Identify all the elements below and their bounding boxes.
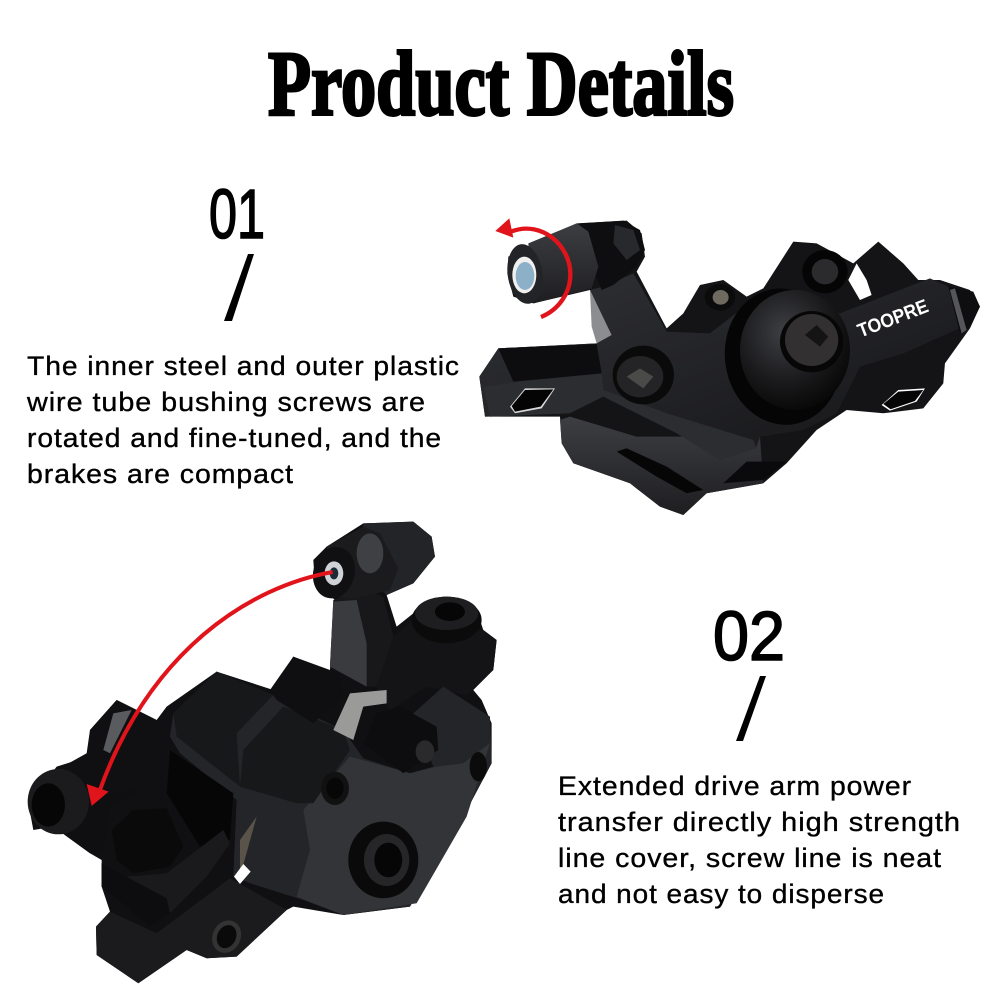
text block 01: brakes are compact	[27, 459, 294, 489]
center screw	[348, 822, 418, 898]
bottom mounting bracket	[96, 878, 287, 983]
step marker 01	[209, 175, 265, 321]
text block 02: and not easy to disperse	[558, 879, 885, 909]
main housing	[170, 672, 492, 915]
mounting bolt	[613, 346, 674, 404]
step marker 02: 02	[713, 597, 785, 675]
end tip	[948, 287, 980, 333]
red sweep arrow	[87, 572, 333, 806]
bulge and pivot bolt	[716, 281, 851, 432]
top right arm and bolt	[377, 620, 497, 710]
text block 02: Extended drive arm power	[558, 771, 912, 801]
photo: brake caliper top view with rotation arrow	[479, 218, 980, 515]
white gap under cavity	[234, 864, 251, 884]
brand label: TOOPRE	[855, 296, 932, 342]
holes	[321, 772, 349, 805]
lever arm	[330, 590, 400, 687]
caliper silhouette	[479, 221, 980, 515]
open cavity	[167, 750, 233, 847]
red rotation arrow	[495, 218, 570, 317]
step marker 01: 01	[209, 175, 265, 253]
photo: brake caliper rear view with red arrow	[28, 522, 497, 983]
small cylinders and spring	[270, 657, 343, 723]
lower block	[102, 830, 230, 927]
text block 02	[558, 771, 961, 909]
step marker 02	[713, 597, 785, 741]
right mount tab	[882, 388, 925, 411]
text block 02: line cover, screw line is neat	[558, 843, 942, 873]
title: Product Details	[268, 32, 734, 134]
barrel adjuster	[580, 221, 645, 290]
barrel	[357, 522, 435, 595]
text block 01: rotated and fine-tuned, and the	[27, 423, 442, 453]
text block 02: transfer directly high strength	[558, 807, 961, 837]
left lobes	[57, 700, 157, 783]
main body	[479, 273, 963, 460]
small screw behind	[705, 284, 735, 311]
text block 01	[26, 351, 460, 489]
text block 01: wire tube bushing screws are	[26, 387, 426, 417]
caliper silhouette	[28, 522, 497, 983]
upper arm gap	[848, 263, 872, 300]
lower pad housing	[560, 417, 763, 515]
text block 01: The inner steel and outer plastic	[27, 351, 460, 381]
